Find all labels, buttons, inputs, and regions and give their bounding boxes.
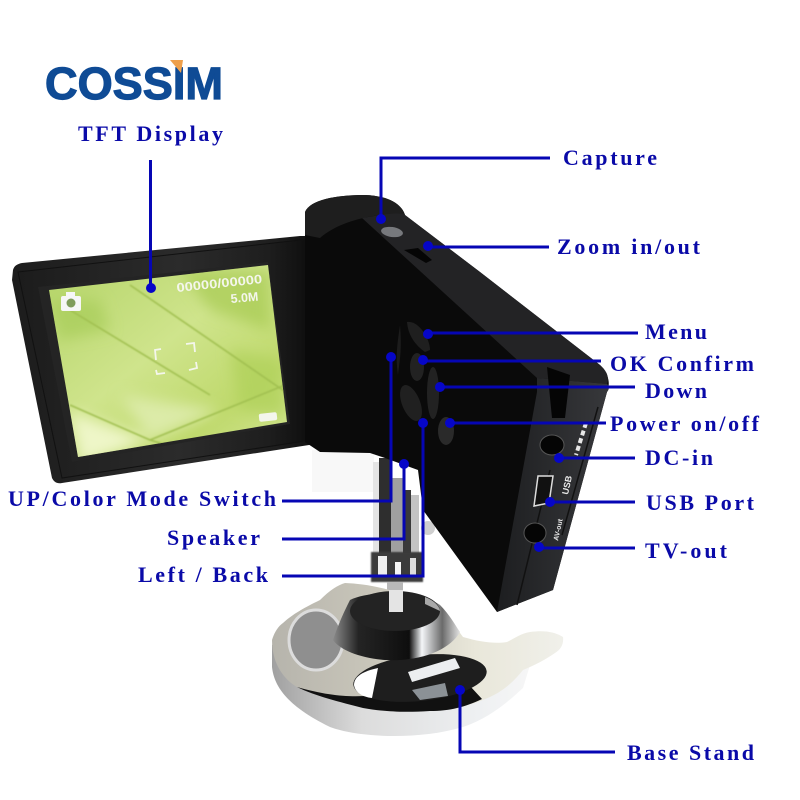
label: USB Port	[545, 490, 755, 515]
label: OK Confirm	[418, 351, 754, 376]
label: UP/Color Mode Switch	[8, 352, 396, 511]
label: Speaker: Speaker	[167, 525, 260, 550]
camera icon	[61, 292, 81, 311]
dome	[333, 593, 460, 660]
label: Down	[435, 378, 707, 403]
label: Power on/off	[445, 411, 760, 436]
label: Speaker	[167, 459, 409, 550]
port label: AV-out: AV-out	[553, 518, 565, 541]
base rim	[272, 620, 530, 736]
flip-out TFT screen	[12, 236, 322, 483]
black band	[297, 686, 482, 712]
label: DC-in: DC-in	[645, 445, 713, 470]
AV-out port	[524, 523, 546, 543]
label: OK Confirm: OK Confirm	[610, 351, 754, 376]
label: Menu	[423, 319, 707, 344]
frame counter: 00000/00000	[176, 272, 263, 295]
label: USB Port: USB Port	[646, 490, 755, 515]
label: Left / Back	[138, 418, 428, 587]
label: UP/Color Mode Switch: UP/Color Mode Switch	[8, 486, 276, 511]
body front	[305, 195, 609, 612]
DC-in port	[540, 435, 564, 455]
screen bezel	[12, 236, 322, 483]
logo: COSSIM: COSSIM	[45, 58, 223, 109]
inner bezel edge	[18, 240, 312, 478]
label: Power on/off: Power on/off	[610, 411, 760, 436]
front well	[351, 648, 489, 708]
label: Base Stand: Base Stand	[627, 740, 754, 765]
label: Capture: Capture	[563, 145, 657, 170]
label: TFT Display	[78, 121, 223, 293]
side slot	[547, 367, 570, 418]
label: Base Stand	[455, 685, 754, 765]
label: Capture	[376, 145, 657, 224]
top edge panel	[362, 214, 608, 384]
base plate top	[272, 583, 563, 711]
hinge top	[305, 195, 405, 238]
label: Menu: Menu	[645, 319, 707, 344]
leaf veins and highlights	[50, 270, 290, 465]
label: TFT Display: TFT Display	[78, 121, 223, 146]
label: Left / Back: Left / Back	[138, 562, 269, 587]
DC icon	[576, 423, 586, 455]
label: Down: Down	[645, 378, 707, 403]
leaf image	[49, 265, 287, 457]
label: TV-out: TV-out	[645, 538, 728, 563]
side panel	[497, 378, 609, 612]
USB port	[534, 476, 553, 506]
microscope stand column	[371, 458, 435, 610]
label: Zoom in/out: Zoom in/out	[557, 234, 701, 259]
focus brackets	[155, 343, 197, 374]
port label: USB: USB	[560, 474, 574, 495]
resolution: 5.0M	[230, 290, 259, 306]
capture button	[380, 226, 404, 238]
label: TV-out	[534, 538, 728, 563]
hinge shadow	[312, 450, 374, 492]
label: Zoom in/out	[423, 234, 701, 259]
label: DC-in	[554, 445, 713, 470]
zoom switch	[404, 248, 432, 263]
control buttons	[396, 322, 454, 445]
side seam lines	[517, 407, 598, 605]
left well	[289, 610, 343, 670]
microscope base stand	[272, 583, 563, 736]
battery icon	[259, 412, 277, 422]
microscope body	[305, 195, 609, 612]
